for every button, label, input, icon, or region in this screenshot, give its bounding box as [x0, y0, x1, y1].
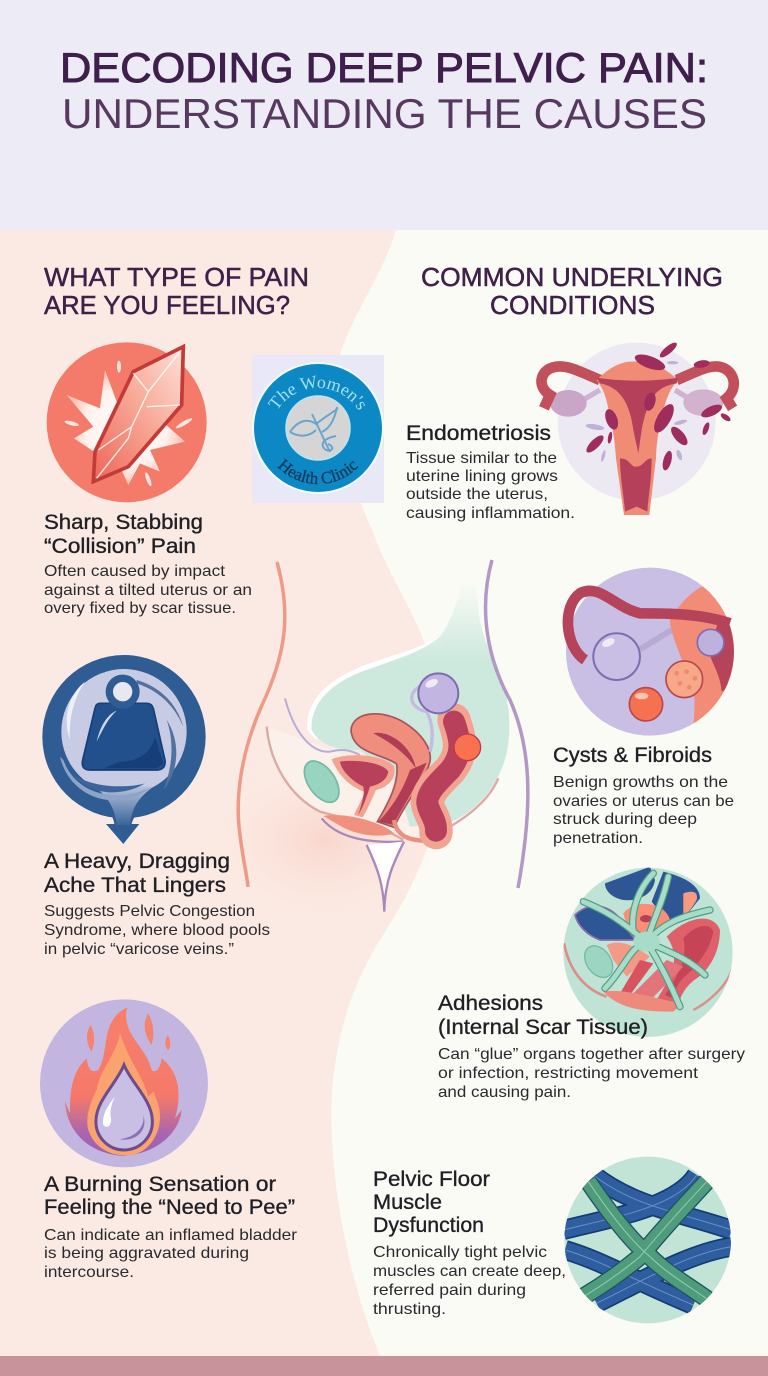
- icon: heavy weight: [42, 655, 206, 844]
- text: adhesions: Adhesions: [438, 992, 543, 1015]
- text: burning sensation: is being aggravated during: [44, 1245, 249, 1262]
- text: sharp stabbing pain: overy fixed by scar tissue.: [44, 600, 236, 617]
- side curve: purple: [486, 560, 528, 888]
- text: cysts and fibroids: Cysts & Fibroids: [553, 744, 712, 767]
- text: heavy dragging ache: in pelvic “varicose veins.”: [44, 941, 234, 958]
- text: cysts and fibroids: struck during deep: [553, 811, 697, 828]
- logo: the women's health clinic: Health Clinic: [277, 458, 358, 484]
- text: endometriosis: [406, 422, 575, 522]
- text: burning sensation: [44, 1173, 298, 1281]
- heading: common underlying conditions: [421, 262, 723, 320]
- title: [60, 44, 708, 137]
- text: pelvic floor muscle dysfunction: [373, 1168, 566, 1318]
- text: sharp stabbing pain: “Collision” Pain: [44, 535, 196, 558]
- peach left panel: [0, 230, 445, 1356]
- text: cysts and fibroids: ovaries or uterus can be: [553, 793, 734, 810]
- text: burning sensation: intercourse.: [44, 1264, 134, 1281]
- icon: cysts and fibroids: [566, 568, 737, 736]
- text: heavy dragging ache: Suggests Pelvic Congestion: [44, 903, 255, 920]
- text: endometriosis: Endometriosis: [406, 422, 551, 445]
- text: endometriosis: outside the uterus,: [406, 486, 548, 503]
- side curve: coral: [238, 562, 285, 887]
- text: sharp stabbing pain: Sharp, Stabbing: [44, 511, 203, 534]
- text: adhesions: Can “glue” organs together after surgery: [438, 1046, 745, 1063]
- text: sharp stabbing pain: [44, 511, 252, 617]
- text: cysts and fibroids: [553, 744, 734, 847]
- heading: what type of pain: ARE YOU FEELING?: [44, 290, 290, 320]
- icon: burning flame and drop: [40, 999, 208, 1167]
- text: pelvic floor muscle dysfunction: thrusting.: [373, 1301, 446, 1318]
- central pelvis diagram: [267, 580, 509, 912]
- text: pelvic floor muscle dysfunction: Pelvic Floor: [373, 1168, 490, 1191]
- text: burning sensation: A Burning Sensation or: [44, 1173, 276, 1196]
- heading: what type of pain: [44, 262, 309, 320]
- icon: endometriosis uterus: [541, 340, 734, 515]
- logo: the women's health clinic: The Women's: [268, 376, 365, 410]
- text: pelvic floor muscle dysfunction: muscles can create deep,: [373, 1263, 566, 1280]
- text: adhesions: [438, 992, 745, 1101]
- text: sharp stabbing pain: against a tilted uterus or an: [44, 582, 252, 599]
- text: heavy dragging ache: Ache That Lingers: [44, 874, 226, 897]
- text: pelvic floor muscle dysfunction: referred pain during: [373, 1282, 526, 1299]
- title: UNDERSTANDING THE CAUSES: [62, 90, 707, 137]
- heading: what type of pain: WHAT TYPE OF PAIN: [44, 262, 309, 292]
- text: endometriosis: Tissue similar to the: [406, 450, 557, 467]
- icon: pelvic floor muscles: [563, 1157, 732, 1323]
- central blush: [205, 755, 445, 925]
- text: endometriosis: causing inflammation.: [406, 505, 575, 522]
- text: adhesions: (Internal Scar Tissue): [438, 1016, 648, 1039]
- text: adhesions: and causing pain.: [438, 1084, 571, 1101]
- text: adhesions: or infection, restricting movement: [438, 1065, 699, 1082]
- text: burning sensation: Feeling the “Need to Pee”: [44, 1196, 295, 1219]
- text: pelvic floor muscle dysfunction: Muscle: [373, 1191, 442, 1214]
- text: pelvic floor muscle dysfunction: Dysfunction: [373, 1214, 484, 1237]
- text: sharp stabbing pain: Often caused by impact: [44, 563, 226, 580]
- text: endometriosis: uterine lining grows: [406, 468, 558, 485]
- text: cysts and fibroids: Benign growths on the: [553, 774, 728, 791]
- title: DECODING DEEP PELVIC PAIN:: [60, 44, 708, 91]
- text: heavy dragging ache: Syndrome, where blood pools: [44, 922, 270, 939]
- text: heavy dragging ache: [44, 850, 270, 958]
- text: heavy dragging ache: A Heavy, Dragging: [44, 850, 230, 873]
- text: cysts and fibroids: penetration.: [553, 830, 643, 847]
- icon: adhesions: [563, 867, 733, 1037]
- logo: the women's health clinic: [252, 355, 384, 503]
- header band: [0, 0, 768, 230]
- bottom band: [0, 1356, 768, 1376]
- heading: common underlying conditions: CONDITIONS: [490, 290, 655, 320]
- text: burning sensation: Can indicate an inflamed bladder: [44, 1227, 298, 1244]
- text: pelvic floor muscle dysfunction: Chronically tight pelvic: [373, 1244, 547, 1261]
- heading: common underlying conditions: COMMON UNDERLYING: [421, 262, 723, 292]
- icon: sharp crystal: [47, 342, 207, 502]
